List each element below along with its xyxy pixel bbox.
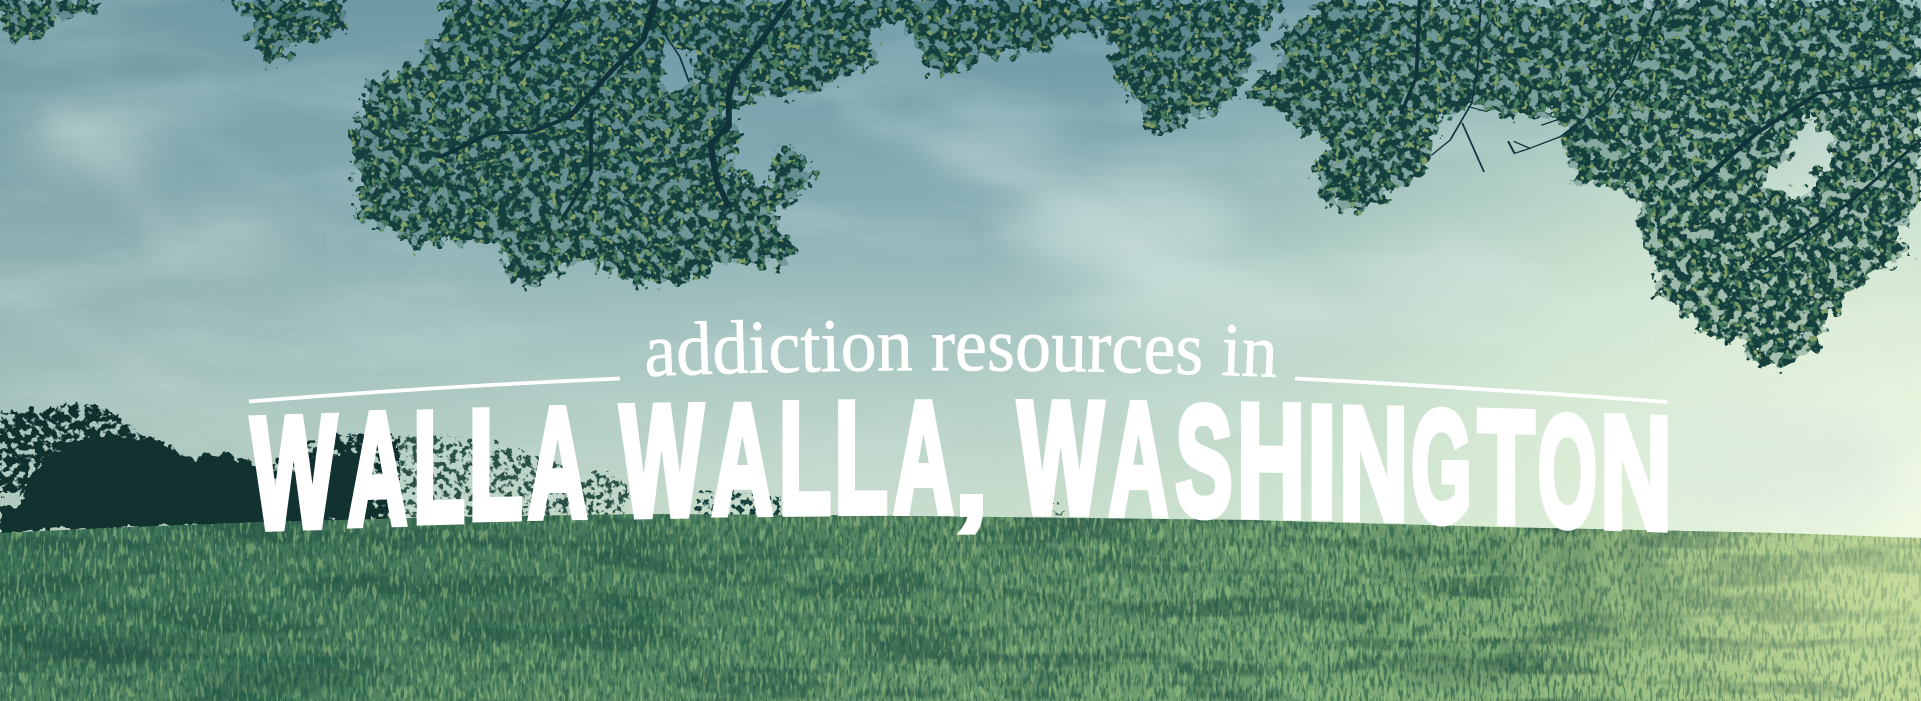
- title: Walla Walla, Washington: S: [1175, 373, 1233, 549]
- title: Walla Walla, Washington: H: [1237, 370, 1305, 551]
- title: Walla Walla, Washington: A: [347, 378, 407, 558]
- title: Walla Walla, Washington: N: [1339, 374, 1408, 553]
- letter shadow on the grass: [1390, 530, 1690, 640]
- title: Walla Walla, Washington: A: [1109, 369, 1168, 549]
- title: Walla Walla, Washington: O: [1538, 383, 1597, 561]
- dark bare crowns at left: [0, 403, 400, 525]
- branches: [441, 0, 1921, 267]
- far-right sunlight on the grass: [1542, 530, 1921, 701]
- light sparse trees: [400, 435, 1066, 521]
- title: Walla Walla, Washington: ,: [955, 410, 988, 538]
- title: Walla Walla, Washington: A: [528, 376, 587, 551]
- title: Walla Walla, Washington: L: [413, 378, 465, 555]
- title: Walla Walla, Washington: L: [469, 376, 523, 552]
- title: Walla Walla, Washington: W: [251, 383, 337, 563]
- background: sky: [0, 0, 1921, 545]
- title: Walla Walla, Washington: L: [834, 369, 888, 547]
- distant tree line: [0, 403, 1066, 534]
- title: Walla Walla, Washington: A: [712, 371, 773, 547]
- tree canopy: left and centre foliage: [0, 0, 1004, 288]
- right rule: [1295, 378, 1667, 402]
- clouds: soft patches: [25, 100, 1910, 510]
- title: Walla Walla, Washington: I: [1307, 373, 1337, 551]
- tree canopy: shade beneath the foliage: [0, 0, 1921, 368]
- grass field: [0, 505, 1921, 701]
- title: Walla Walla, Washington: W: [1018, 370, 1103, 547]
- grass shadow patches: [10, 605, 1530, 694]
- cirrus streaks: [0, 110, 1640, 440]
- subtitle: addiction resources in: [646, 320, 1276, 378]
- title: Walla Walla, Washington: T: [1478, 377, 1534, 557]
- title: Walla Walla, Washington: [251, 369, 1672, 564]
- tree canopy: right foliage: [960, 0, 1921, 368]
- dark trees at left: [0, 435, 372, 534]
- title: Walla Walla, Washington: L: [779, 369, 831, 547]
- title: Walla Walla, Washington: W: [620, 372, 703, 550]
- left rule: [249, 378, 620, 402]
- title: Walla Walla, Washington: G: [1411, 378, 1472, 556]
- title: Walla Walla, Washington: A: [894, 369, 953, 546]
- title: Walla Walla, Washington: N: [1600, 384, 1672, 564]
